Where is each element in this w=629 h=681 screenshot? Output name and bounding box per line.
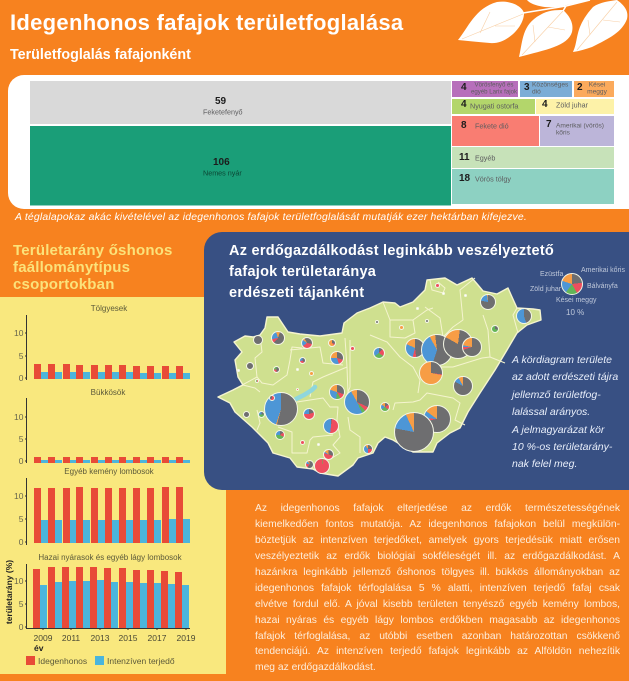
- label: Vörös tölgy: Vörös tölgy: [475, 174, 511, 183]
- body text: tendenciájú. Az intenzíven terjedő fafajok leginkább az Alföldön nehezítik: [255, 646, 620, 657]
- chart: Hazai nyárasok és egyéb lágy lombosok: 2009: [34, 633, 53, 643]
- chart: Tölgyesek: 10: [14, 328, 24, 338]
- body text: Az idegenhonos fafajok elterjedése az erdők természetességének: [255, 503, 620, 514]
- legend label: Amerikai kőris: Amerikai kőris: [581, 267, 625, 274]
- label: Közönséges dió: [532, 82, 568, 96]
- map note: az adott erdészeti tájra: [512, 371, 618, 383]
- panel: treemap: [8, 75, 629, 209]
- label: 4: 4: [542, 99, 548, 110]
- axis title: év: év: [34, 643, 44, 653]
- chart: Hazai nyárasok és egyéb lágy lombosok: 2019: [177, 633, 196, 643]
- label: 59: 59: [215, 96, 226, 107]
- label: 4: 4: [461, 99, 467, 110]
- cell: Egyéb: [452, 147, 614, 168]
- body text: elvétve fordul elő. A jóval kisebb területen tenyésző egyéb kemény lombos,: [255, 599, 620, 610]
- cell: Zöld juhar: [536, 99, 614, 114]
- legend label: Zöld juhar: Zöld juhar: [530, 286, 561, 293]
- panel: map background: [204, 232, 629, 490]
- label: Fekete dió: Fekete dió: [475, 121, 509, 130]
- chart: Bükkösök: [14, 388, 190, 466]
- Lake Balaton: [296, 387, 315, 399]
- label: 18: 18: [459, 173, 470, 184]
- chart: Egyéb kemény lombosok: 5: [19, 514, 24, 524]
- label: 3: 3: [524, 82, 530, 93]
- map note: A kördiagram területe: [512, 354, 612, 366]
- subtitle: Területfoglalás fafajonként: [10, 47, 191, 63]
- chart: Tölgyesek: Tölgyesek: [91, 304, 128, 313]
- chart: Hazai nyárasok és egyéb lágy lombosok: 5: [19, 599, 24, 609]
- label: 11: 11: [459, 152, 470, 163]
- label: Vörösfenyő és egyéb Larix fajok: egyéb Larix fajok: [471, 88, 517, 96]
- chart: Hazai nyárasok és egyéb lágy lombosok: 2015: [119, 633, 138, 643]
- body text: fafajok térfoglalása, az utóbbi esetben azonban határozottan csökkenő: [255, 630, 620, 642]
- cell: Nyugati ostorfa: [452, 99, 535, 114]
- label: 106: 106: [213, 157, 230, 168]
- label: Kései meggy: meggy: [587, 89, 607, 96]
- pie charts on map: [237, 283, 532, 474]
- body text: kiemelkedően fontos mutatója. Az idegenhonos fafajokon belül megkülön-: [255, 519, 620, 530]
- legend label: 10 %: 10 %: [566, 308, 584, 317]
- cell: Közönséges dió: [520, 81, 572, 97]
- cell: Vörösfenyő: [452, 81, 518, 97]
- cell: Vörös tölgy: [452, 169, 614, 204]
- legend: Idegenhonos: [38, 656, 87, 666]
- body text: hazánkra leginkább jellemző őshonos tölgyes ill. bükkös állományokban az: [255, 567, 620, 578]
- chart: Tölgyesek: 5: [19, 351, 24, 361]
- heading: native stand types: faállománytípus: [13, 259, 130, 276]
- label: Kései meggy: Kései: [589, 82, 605, 89]
- panel: charts background: [0, 297, 226, 674]
- label: 2: 2: [577, 82, 583, 93]
- panel: text background: [226, 490, 629, 681]
- cell: Amerikai kőris: [540, 116, 614, 146]
- map note: jellemző területfog-: [512, 389, 601, 401]
- map note: lalással arányos.: [512, 406, 590, 418]
- legend label: Kései meggy: Kései meggy: [556, 297, 596, 304]
- chart: Hazai nyárasok és egyéb lágy lombosok: 0: [19, 622, 24, 632]
- body text: böztetjük az intenzíven terjedőket, amelyek gyors terjedésük miatt erősen: [255, 535, 620, 546]
- axis title: területarány (%): területarány (%): [4, 560, 14, 624]
- label: Kései meggy: [587, 82, 607, 96]
- cell: Nemes nyár: [30, 126, 451, 206]
- body text: meg az erdőgazdálkodást.: [255, 662, 376, 673]
- label: Közönséges dió: dió: [532, 89, 541, 96]
- heading: native stand types: [13, 242, 173, 293]
- chart: Bükkösök: Bükkösök: [91, 388, 126, 397]
- map note: nak felel meg.: [512, 458, 577, 470]
- body text: hazai nyáras és egyéb lágy lombos erdőkben magasabb az idegenhonos: [255, 615, 620, 626]
- label: Amerikai (vörös) kőris: [556, 123, 604, 137]
- body text: veszélyeztetik az erdők biológiai sokféleségét ill. az erdőgazdálkodást. A: [255, 551, 620, 562]
- label: 4: 4: [461, 82, 467, 93]
- chart: Egyéb kemény lombosok: [14, 467, 190, 547]
- cell: Kései meggy: [574, 81, 614, 97]
- cell: Fekete dió: [452, 116, 539, 146]
- chart: Egyéb kemény lombosok: Egyéb kemény lombosok: [64, 467, 155, 476]
- legend label: Ezüstfa: Ezüstfa: [540, 271, 563, 278]
- legend pie: [561, 273, 583, 295]
- chart: Egyéb kemény lombosok: 0: [19, 537, 24, 547]
- map note: A jelmagyarázat kör: [512, 424, 604, 436]
- legend: Intenzíven terjedő: [107, 656, 175, 666]
- chart: Bükkösök: 0: [19, 456, 24, 466]
- chart: Hazai nyárasok és egyéb lágy lombosok: Hazai nyárasok és egyéb lágy lombosok: [38, 553, 183, 562]
- chart: Bükkösök: 10: [14, 412, 24, 422]
- label: Közönséges dió: Közönséges: [532, 82, 568, 89]
- caption: A téglalapokaz akác kivételével az idegenhonos fafajok területfoglalását mutatják ezer hektárban kifejezve.: [15, 212, 527, 223]
- icon: white leaves: [458, 0, 628, 57]
- body text: [255, 503, 620, 673]
- title: Idegenhonos fafajok területfoglalása: [10, 10, 403, 35]
- chart: Hazai nyárasok és egyéb lágy lombosok: 10: [14, 576, 24, 586]
- chart: Hazai nyárasok és egyéb lágy lombosok: 2017: [148, 633, 167, 643]
- cell: Feketefenyő: [30, 81, 451, 124]
- chart: Hazai nyárasok és egyéb lágy lombosok: 2011: [62, 633, 80, 643]
- treemap chart: [30, 81, 614, 206]
- bar charts: [4, 304, 196, 666]
- map note: 10 %-os területarány-: [512, 441, 612, 453]
- legend: [26, 656, 175, 666]
- body text: idegenhonos fafajok térfoglalása 5 % alatti, intenzíven terjedő fafaj csak: [255, 583, 620, 594]
- label: Vörösfenyő és egyéb Larix fajok: Vörösfenyő és: [475, 81, 513, 88]
- map heading: erdészeti tájanként: [229, 285, 364, 301]
- chart: Bükkösök: 5: [19, 434, 24, 444]
- chart: Hazai nyárasok és egyéb lágy lombosok: 2013: [91, 633, 110, 643]
- map note: [510, 354, 618, 470]
- map of Hungary: [217, 277, 542, 477]
- label: Zöld juhar: Zöld juhar: [556, 100, 588, 109]
- pie legend: [530, 266, 625, 317]
- label: Vörösfenyő és egyéb Larix fajok: [471, 81, 517, 96]
- label: Amerikai (vörös) kőris: kőris: [556, 130, 570, 137]
- chart: Egyéb kemény lombosok: 10: [14, 491, 24, 501]
- chart: Tölgyesek: [14, 304, 190, 383]
- map heading: Az erdőgazdálkodást leginkább veszélyeztető: [229, 243, 554, 259]
- label: Nemes nyár: Nemes nyár: [203, 168, 242, 177]
- heading: native stand types: csoportokban: [13, 276, 115, 293]
- legend label: Bálványfa: Bálványfa: [587, 283, 618, 290]
- heading: native stand types: Területarány őshonos: [13, 242, 173, 259]
- label: Feketefenyő: Feketefenyő: [203, 107, 243, 116]
- chart: Hazai nyárasok és egyéb lágy lombosok: [14, 553, 196, 643]
- label: Nyugati ostorfa: Nyugati ostorfa: [470, 101, 518, 110]
- chart: Tölgyesek: 0: [19, 373, 24, 383]
- label: 8: 8: [461, 120, 467, 131]
- label: Egyéb: Egyéb: [475, 153, 495, 162]
- map heading: fafajok területaránya: [229, 264, 376, 280]
- label: Amerikai (vörös) kőris: Amerikai (vörös): [556, 123, 604, 130]
- map heading: [229, 243, 554, 301]
- label: 7: 7: [546, 119, 552, 130]
